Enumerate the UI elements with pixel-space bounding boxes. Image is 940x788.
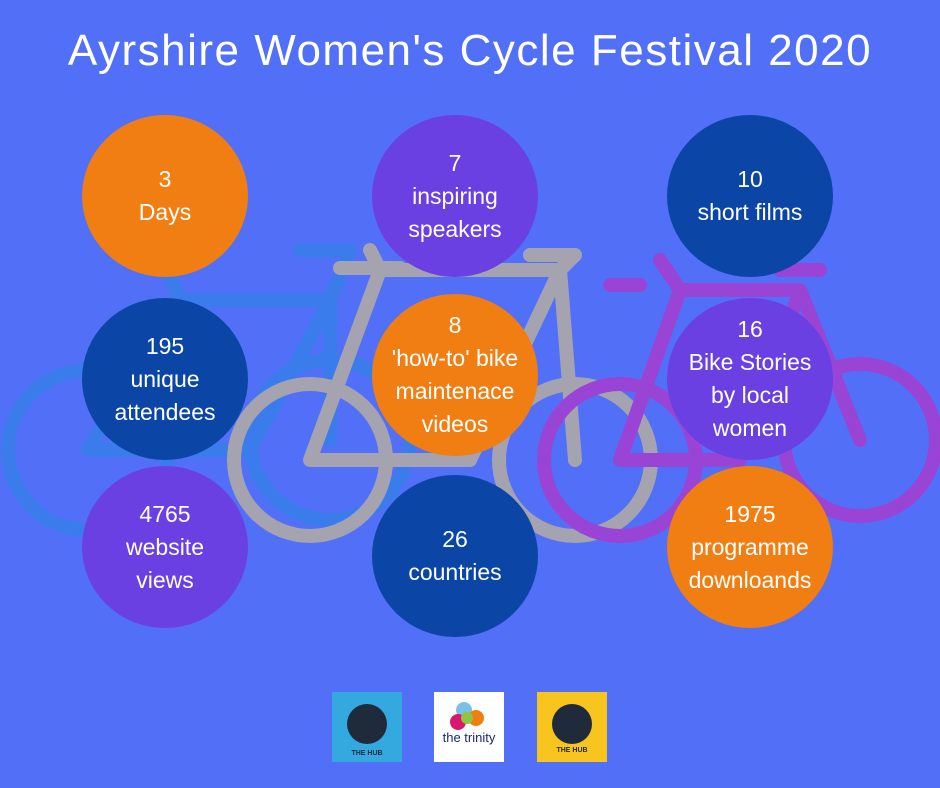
stat: 7 speakers: [372, 115, 538, 277]
stat: 26 countries: 26: [442, 526, 468, 552]
stat: 3 days: 3: [159, 166, 171, 192]
stat: 3 days: [82, 115, 248, 277]
stat: 1975 downloads: downloands: [689, 566, 811, 592]
stat: 3 days: Days: [139, 199, 191, 225]
stat: 4765 views: website: [126, 534, 204, 560]
stat: 7 speakers: 7: [449, 150, 461, 176]
stat: 8 videos: [372, 294, 538, 456]
logo: the hub blue: [332, 692, 402, 762]
stat: 1975 downloads: programme: [691, 534, 809, 560]
stat: 7 speakers: speakers: [408, 216, 502, 242]
stat: 4765 views: views: [136, 566, 194, 592]
stat: 1975 downloads: [667, 466, 833, 628]
stat: 7 speakers: inspiring: [412, 182, 498, 208]
stat: 10 films: 10: [737, 166, 763, 192]
stat: 195 attendees: attendees: [114, 398, 216, 424]
stat: 16 bike stories: by local: [711, 382, 789, 408]
stat: 195 attendees: [82, 298, 248, 460]
stat: 8 videos: videos: [422, 411, 488, 437]
stat: 4765 views: [82, 466, 248, 628]
stat: 195 attendees: unique: [130, 366, 200, 392]
stat: 16 bike stories: women: [713, 415, 787, 441]
stat: 16 bike stories: 16: [737, 316, 763, 342]
logo: the hub yellow: THE HUB: [556, 747, 588, 754]
stat: 26 countries: countries: [408, 559, 502, 585]
logo: the hub yellow: [537, 692, 607, 762]
stat: 26 countries: [372, 475, 538, 637]
stat: 8 videos: maintenace: [396, 378, 514, 404]
logo: the hub blue: THE HUB: [351, 750, 383, 757]
stat: 10 films: short films: [698, 199, 802, 225]
stat: 8 videos: 8: [449, 312, 461, 338]
logo: the trinity: the trinity: [443, 730, 496, 745]
stat: 16 bike stories: Bike Stories: [689, 349, 811, 375]
stat: 10 films: [667, 115, 833, 277]
logo: the trinity: [434, 692, 504, 762]
stat: 195 attendees: 195: [146, 332, 184, 358]
title: Ayrshire Women's Cycle Festival 2020: [68, 26, 872, 75]
stat: 1975 downloads: 1975: [724, 500, 776, 526]
stat: 8 videos: 'how-to' bike: [392, 345, 518, 371]
stat: 4765 views: 4765: [139, 500, 191, 526]
stat: 16 bike stories: [667, 298, 833, 460]
